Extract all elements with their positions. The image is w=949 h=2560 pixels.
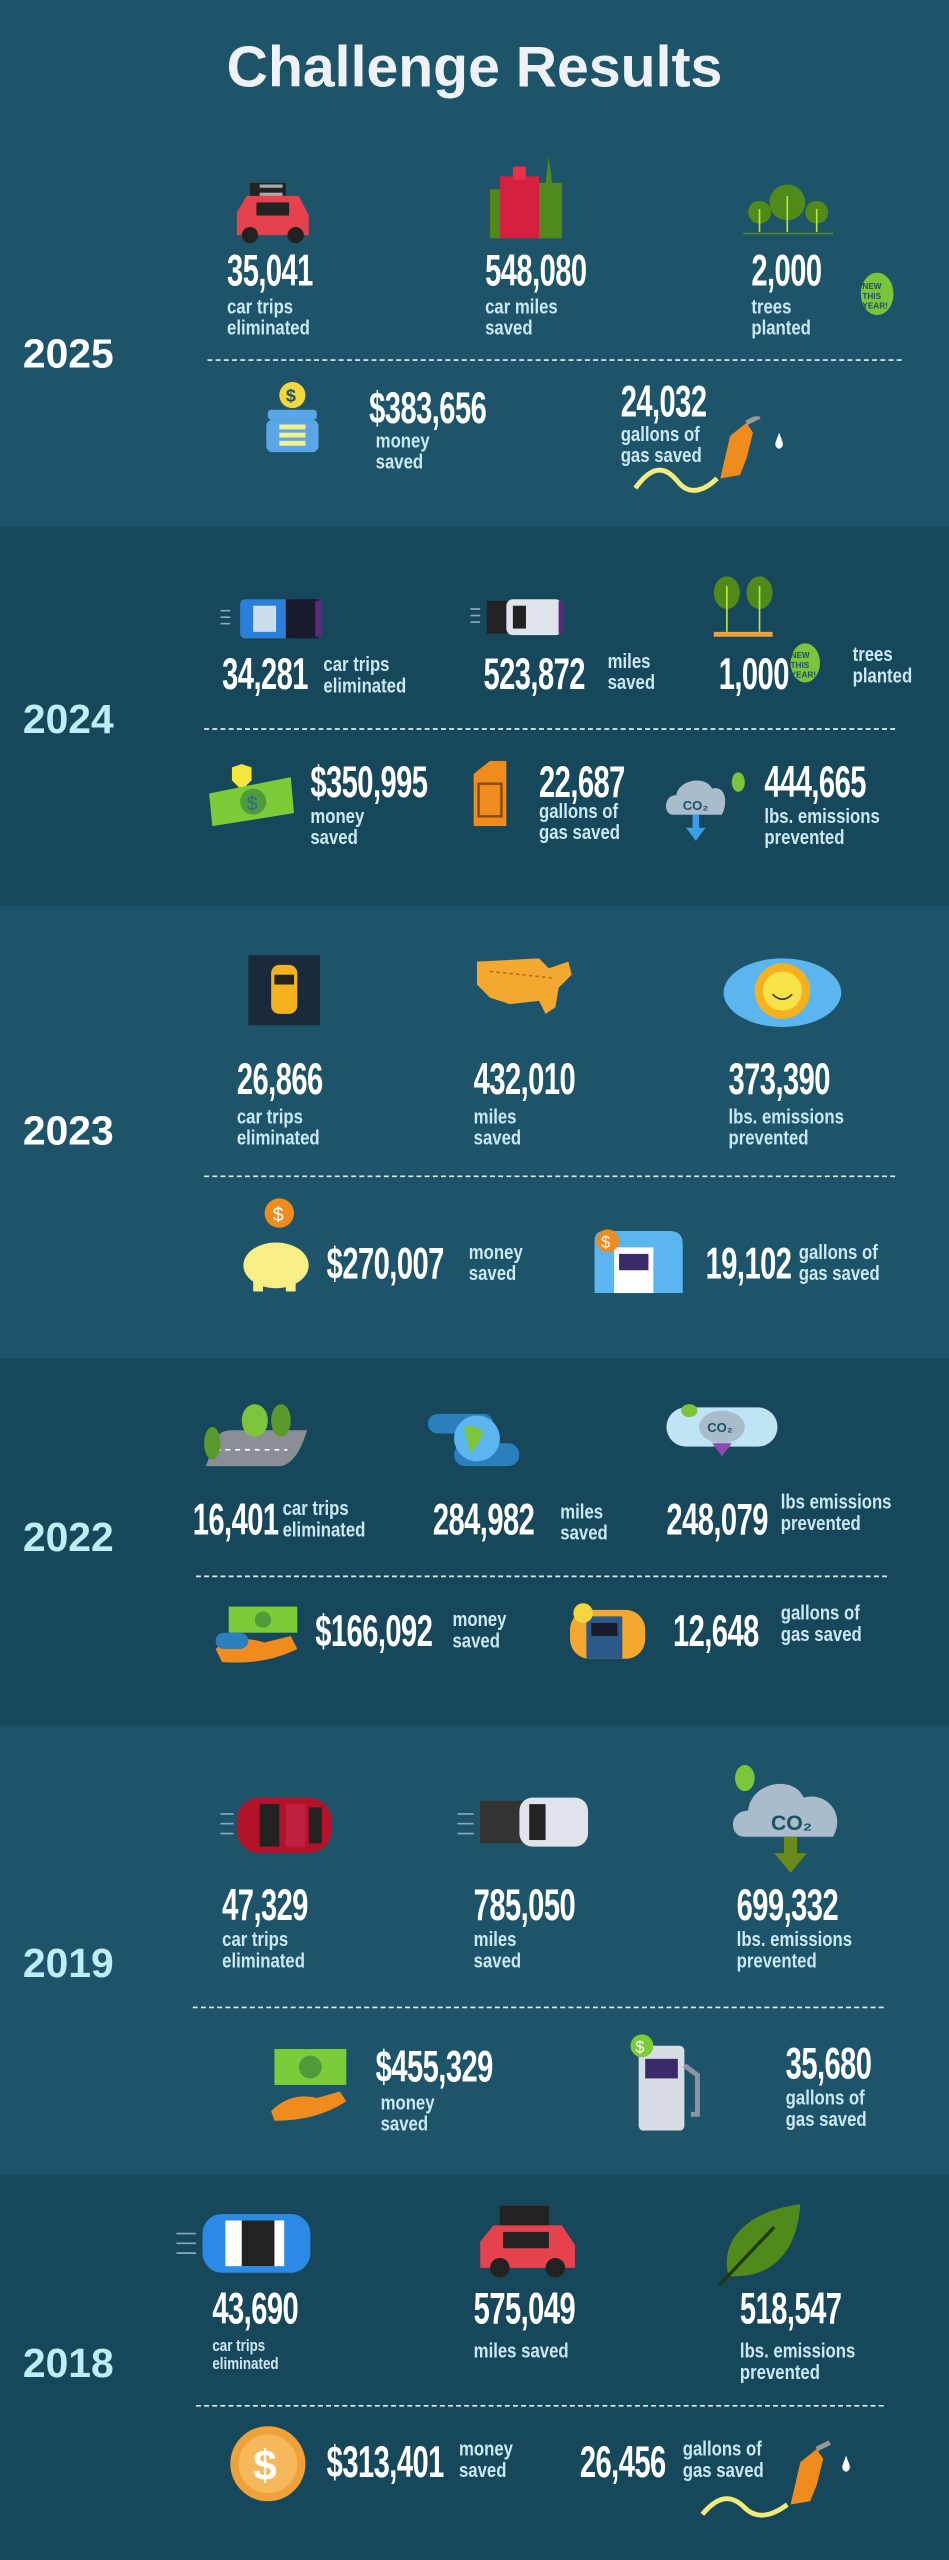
stat: money: $383,656 xyxy=(369,384,486,433)
stat: car trips: 43,690 xyxy=(212,2284,298,2333)
section: 2025: gas saved xyxy=(621,444,702,467)
icon: cash with shield xyxy=(209,764,294,826)
section: 2023: money xyxy=(469,1241,523,1264)
badge: new this year: NEW xyxy=(862,282,882,291)
year 2025: 2025 xyxy=(23,331,114,377)
badge: new this year: THIS xyxy=(791,661,810,670)
section: 2025: trees xyxy=(751,296,791,318)
icon: red car xyxy=(236,182,309,244)
stat: miles: 432,010 xyxy=(474,1055,575,1104)
icon: building xyxy=(490,157,562,238)
stat: emissions: 373,390 xyxy=(728,1055,830,1104)
stat: gallons: 22,687 xyxy=(539,758,625,807)
icon: gas station xyxy=(594,1229,683,1294)
section: 2023: gallons of xyxy=(799,1241,878,1264)
stat: miles: 523,872 xyxy=(483,650,585,699)
section: 2022: saved xyxy=(452,1629,500,1652)
badge: new this year: THIS xyxy=(862,292,882,301)
icon: car on road tile xyxy=(248,955,320,1026)
stat: gallons: 24,032 xyxy=(621,377,706,426)
icon: cash with shield: $ xyxy=(247,793,258,815)
stat: money: $455,329 xyxy=(376,2043,493,2091)
section: 2018 xyxy=(0,2175,949,2560)
stat: car miles: 548,080 xyxy=(485,247,587,296)
section: 2025: saved xyxy=(485,317,533,340)
section: 2023: prevented xyxy=(728,1127,809,1149)
section: 2019: eliminated xyxy=(222,1949,305,1972)
section: 2024: gallons of xyxy=(539,800,618,823)
stat: car trips: 47,329 xyxy=(222,1881,308,1930)
section: 2022: money xyxy=(452,1608,506,1631)
section: 2022: prevented xyxy=(781,1512,861,1535)
year 2023: 2023 xyxy=(23,1109,114,1154)
icon: coin: $ xyxy=(253,2442,277,2489)
section: 2019: saved xyxy=(381,2113,428,2136)
stat: miles: 575,049 xyxy=(474,2284,575,2333)
section: 2023: eliminated xyxy=(237,1127,320,1149)
icon: gas station: $ xyxy=(601,1233,610,1251)
icon: coin jar xyxy=(266,382,318,452)
section: 2019: gallons of xyxy=(786,2087,865,2109)
icon: leaf xyxy=(718,2204,800,2286)
section: 2018: car trips xyxy=(212,2338,265,2356)
icon: USA map xyxy=(476,958,572,1014)
icon: road trees xyxy=(204,1404,307,1466)
section: 2024: saved xyxy=(310,826,358,849)
icon: CO2 cloud xyxy=(666,772,745,841)
section: 2023 xyxy=(0,906,949,1358)
stat: miles: 284,982 xyxy=(433,1496,534,1545)
year 2024: 2024 xyxy=(23,697,114,743)
stat: emissions: 248,079 xyxy=(666,1496,768,1545)
stat: money: $313,401 xyxy=(327,2438,444,2487)
section: 2025: money xyxy=(376,429,430,452)
section: 2018: gallons of xyxy=(683,2438,762,2460)
stat: money: $350,995 xyxy=(310,758,427,807)
icon: coin xyxy=(230,2426,306,2502)
icon: fuel nozzle xyxy=(700,2440,850,2518)
year 2018: 2018 xyxy=(23,2341,114,2387)
icon: two trees xyxy=(714,576,773,637)
icon: fuel nozzle xyxy=(634,416,783,493)
section: 2018: eliminated xyxy=(212,2356,279,2374)
section: 2019: prevented xyxy=(737,1949,817,1972)
section: 2024: trees xyxy=(853,643,893,666)
section: 2024: money xyxy=(310,805,364,828)
section: 2019: money xyxy=(381,2091,435,2114)
section: 2025: gallons of xyxy=(621,423,700,446)
section: 2025: car miles xyxy=(485,296,558,318)
icon: gas pump xyxy=(630,2034,700,2131)
icon: blue car xyxy=(176,2214,310,2273)
section: 2018: gas saved xyxy=(683,2459,764,2482)
icon: CO2 cloud: CO₂ xyxy=(683,798,708,813)
stat: emissions: 699,332 xyxy=(737,1881,838,1930)
year 2022: 2022 xyxy=(23,1515,114,1561)
stat: miles: 785,050 xyxy=(474,1881,575,1930)
section: 2019: car trips xyxy=(222,1928,288,1951)
section: 2024: gas saved xyxy=(539,821,620,844)
icon: CO2 cloud xyxy=(666,1404,778,1456)
section: 2018: money xyxy=(459,2438,513,2460)
section: 2024: prevented xyxy=(764,826,844,849)
icon: gas station xyxy=(570,1603,646,1659)
icon: blue bus xyxy=(220,599,322,638)
section: 2023: saved xyxy=(469,1262,516,1285)
section: 2024: miles xyxy=(608,650,650,673)
icon: globe xyxy=(428,1414,520,1466)
badge: new this year: NEW xyxy=(791,651,810,660)
stat: emissions: 518,547 xyxy=(740,2284,841,2333)
section: 2023: gas saved xyxy=(799,1262,880,1285)
icon: cash hand xyxy=(216,1606,298,1663)
section: 2022: miles xyxy=(560,1500,603,1523)
stat: trees: 2,000 xyxy=(751,247,822,296)
section: 2022 xyxy=(0,1358,949,1726)
section: 2018: lbs. emissions xyxy=(740,2340,855,2363)
icon: piggy bank: $ xyxy=(273,1204,284,1226)
section: 2019: lbs. emissions xyxy=(737,1928,852,1951)
section: 2024 xyxy=(0,527,949,906)
stat: trees: 1,000 xyxy=(719,650,789,699)
stat: money: $270,007 xyxy=(327,1239,444,1288)
icon: trees xyxy=(743,184,833,234)
section: 2025: car trips xyxy=(227,296,293,318)
stat: car trips: 16,401 xyxy=(193,1496,279,1545)
icon: red car xyxy=(480,2206,575,2278)
title: Challenge Results xyxy=(227,36,722,100)
section: 2022: saved xyxy=(560,1522,608,1545)
section: 2019: gas saved xyxy=(786,2108,867,2131)
badge: new this year: YEAR! xyxy=(791,671,816,680)
badge: new this year xyxy=(860,272,894,316)
section: 2019 xyxy=(0,1726,949,2175)
section: 2023: miles xyxy=(474,1105,517,1128)
section: 2024: saved xyxy=(608,671,655,694)
section: 2022: eliminated xyxy=(283,1518,365,1541)
stat: gallons: 35,680 xyxy=(786,2039,871,2088)
icon: coin jar: $ xyxy=(286,386,296,406)
section: 2022: lbs emissions xyxy=(781,1491,892,1514)
section: 2024: car trips xyxy=(323,653,390,676)
icon: white truck xyxy=(470,599,564,636)
section: 2024: eliminated xyxy=(323,674,406,697)
stat: money: $166,092 xyxy=(315,1607,432,1656)
section: 2018: miles saved xyxy=(474,2340,569,2363)
icon: red car xyxy=(220,1798,332,1854)
section: 2022: car trips xyxy=(283,1497,349,1520)
icon: CO2 cloud: CO₂ xyxy=(771,1812,812,1835)
section: 2025: planted xyxy=(751,317,811,340)
icon: truck xyxy=(457,1798,588,1847)
section: 2019: miles xyxy=(474,1928,517,1951)
section: 2025 xyxy=(0,0,949,527)
stat: emissions: 444,665 xyxy=(764,758,866,807)
stat: car trips: 35,041 xyxy=(227,247,313,296)
icon: cash hand xyxy=(271,2049,346,2121)
section: 2018: saved xyxy=(459,2459,506,2482)
stat: gallons: 26,456 xyxy=(580,2438,666,2487)
section: 2025: eliminated xyxy=(227,317,310,340)
section: 2023: lbs. emissions xyxy=(728,1105,844,1128)
badge: new this year: YEAR! xyxy=(862,302,888,311)
section: 2022: gas saved xyxy=(781,1623,862,1646)
section: 2025: saved xyxy=(376,451,423,473)
section: 2024: planted xyxy=(853,665,912,687)
icon: gas pump: $ xyxy=(635,2038,644,2056)
section: 2018: prevented xyxy=(740,2361,820,2384)
section: 2024: lbs. emissions xyxy=(764,805,880,828)
section: 2022: gallons of xyxy=(781,1602,860,1625)
icon: CO2 cloud: CO₂ xyxy=(707,1420,733,1435)
icon: sun xyxy=(724,958,842,1027)
section: 2019: saved xyxy=(474,1949,521,1972)
section: 2023: car trips xyxy=(237,1105,303,1128)
icon: piggy bank xyxy=(243,1198,309,1292)
year 2019: 2019 xyxy=(23,1941,114,1987)
icon: jerry can xyxy=(474,760,506,826)
stat: gallons: 19,102 xyxy=(706,1239,791,1288)
section: 2023: saved xyxy=(474,1127,521,1149)
icon: CO2 cloud xyxy=(732,1765,838,1873)
stat: gallons: 12,648 xyxy=(673,1607,759,1656)
badge: new this year xyxy=(790,643,820,682)
stat: car trips: 26,866 xyxy=(237,1055,323,1104)
stat: car trips: 34,281 xyxy=(222,650,308,699)
